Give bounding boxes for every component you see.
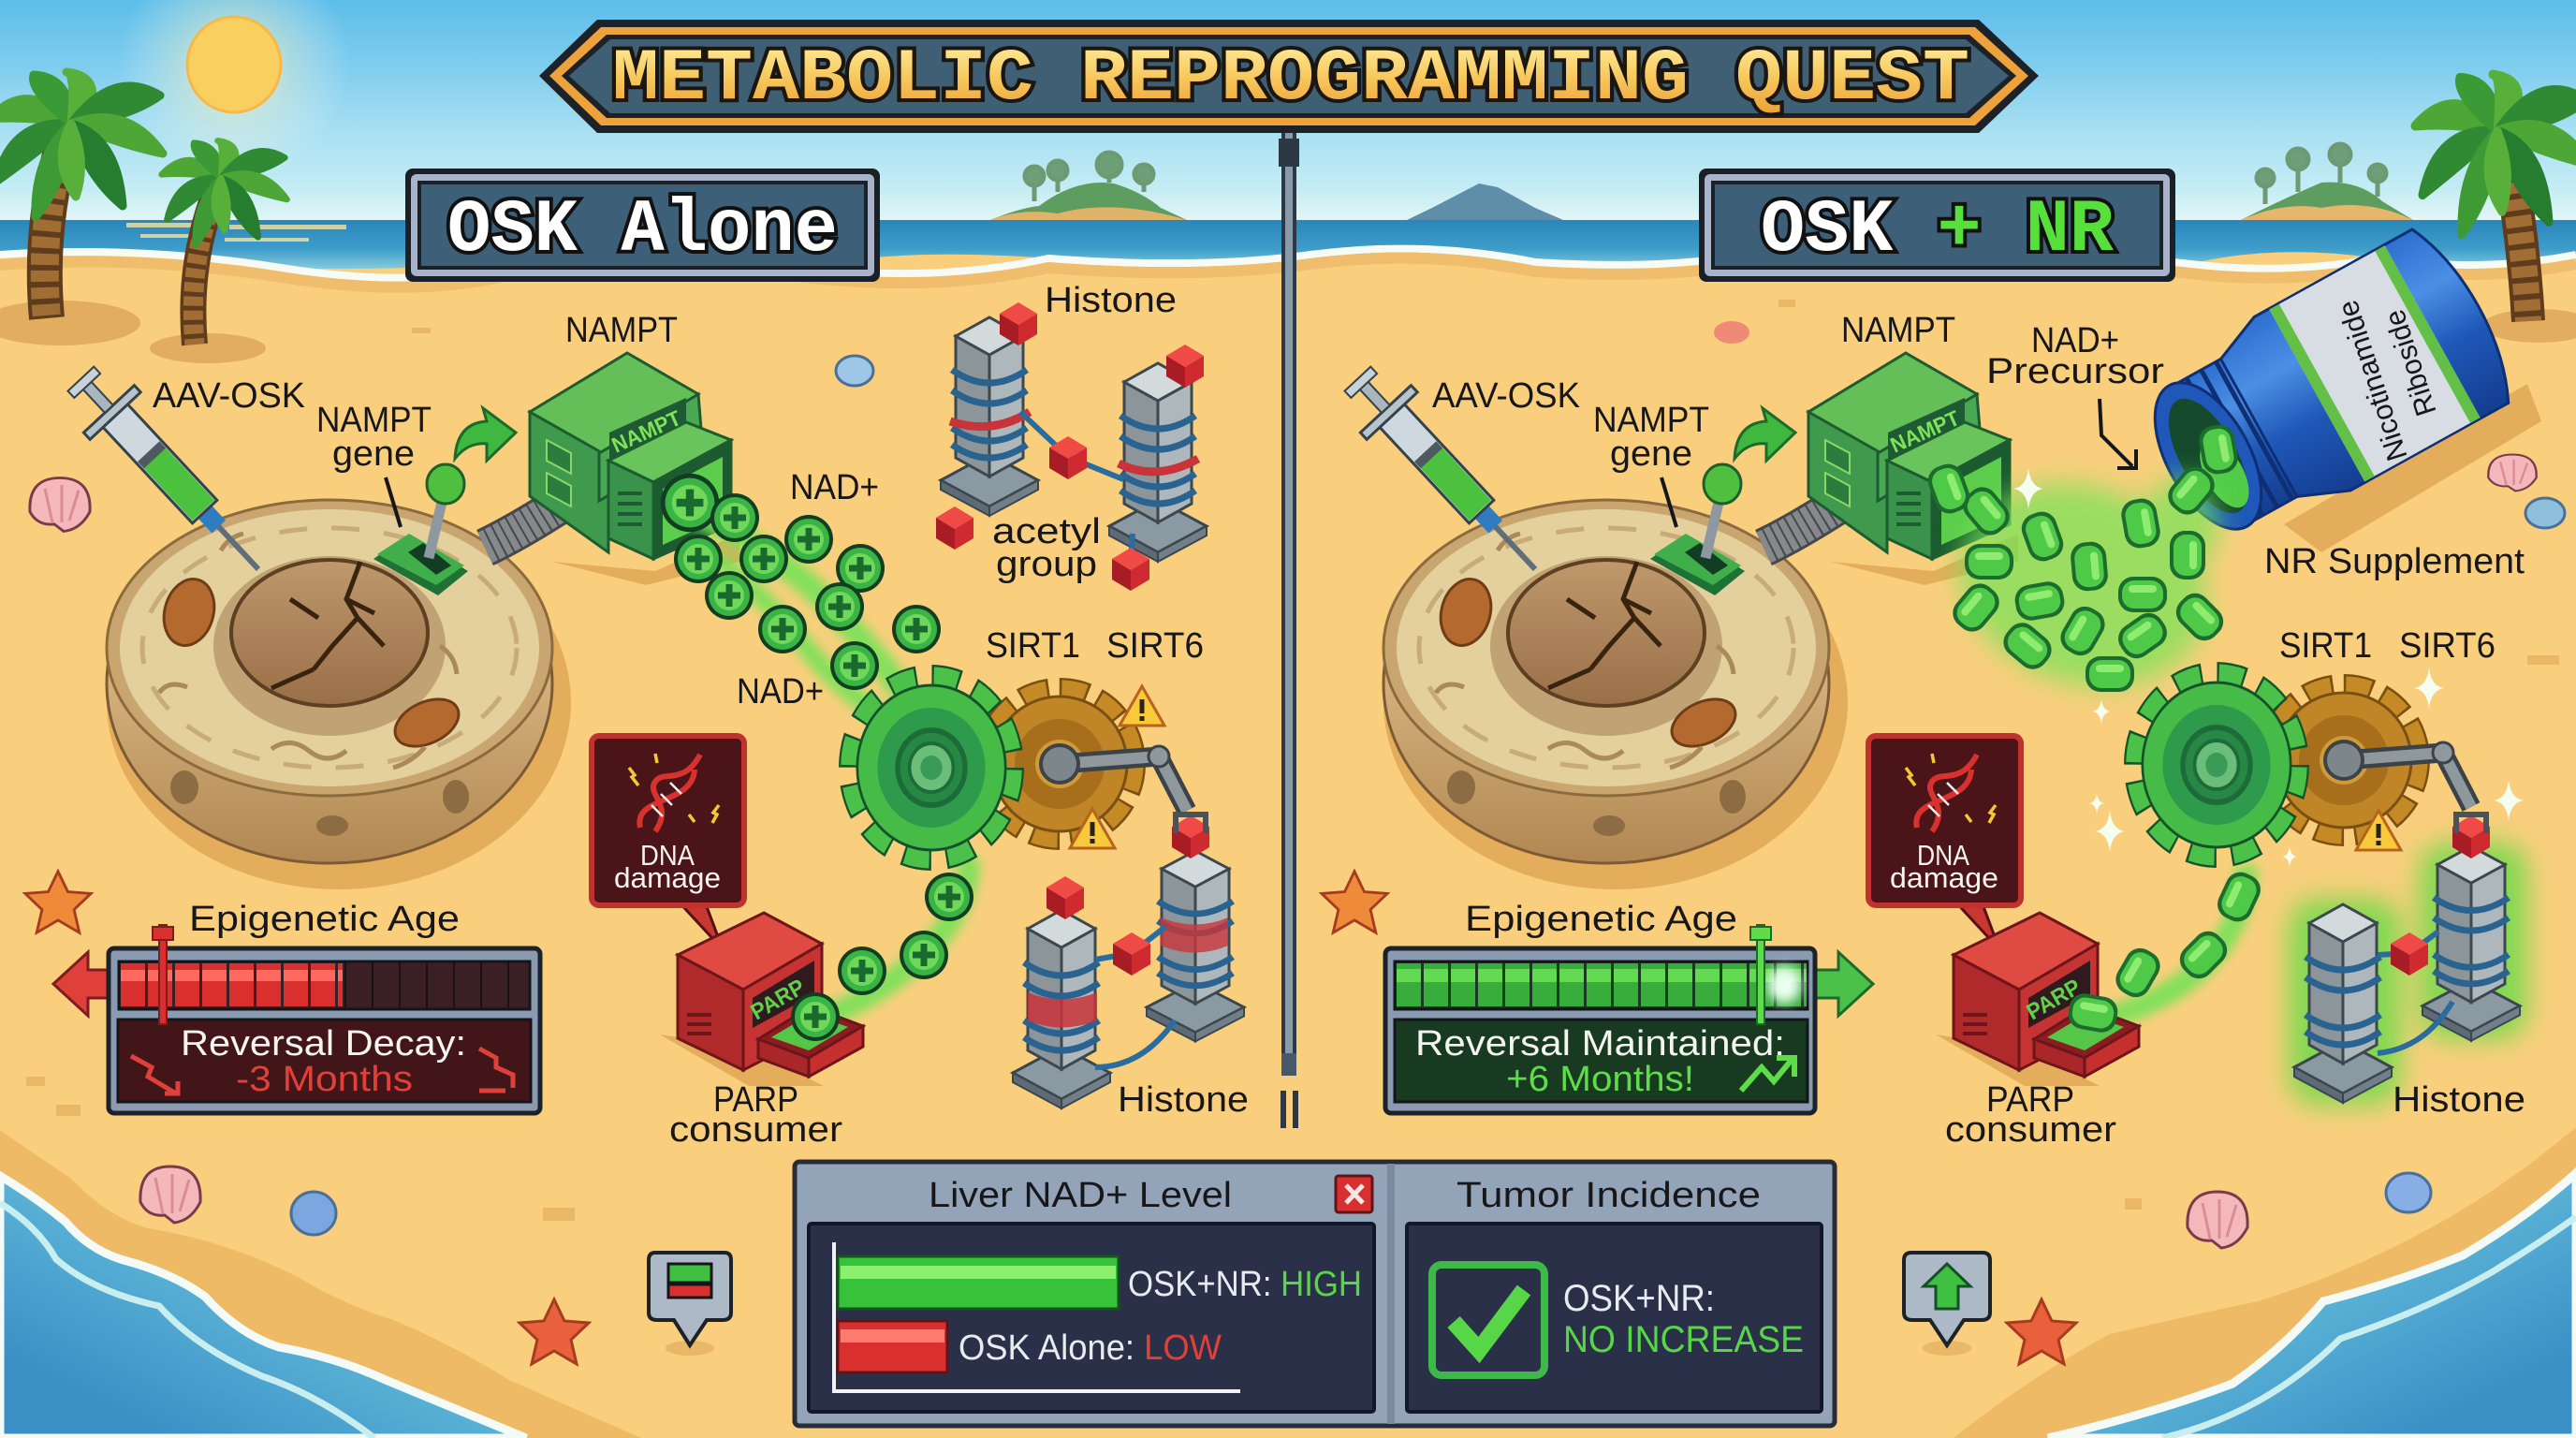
DNA damage callout	[1868, 736, 2021, 949]
arrow: gene activation	[1734, 408, 1795, 461]
title banner	[539, 20, 2039, 133]
labels	[153, 281, 1249, 1150]
labels: PARP	[713, 1080, 798, 1120]
labels: NAMPT	[1841, 311, 1955, 350]
labels: Precursor	[1986, 352, 2164, 391]
beach decorations: starfish, shells and pebbles	[25, 300, 2565, 1364]
gear: SIRT6	[2271, 687, 2417, 833]
age marker	[153, 925, 173, 1024]
heading: OSK + NR: OSK + NR	[1761, 188, 2114, 273]
arrow: gene activation	[455, 408, 516, 461]
arm claw and cube	[2452, 814, 2490, 858]
DNA damage label	[1890, 839, 1998, 894]
labels: SIRT6	[2399, 626, 2496, 666]
heading: OSK Alone	[405, 169, 880, 282]
icon: bar chart pin	[649, 1253, 731, 1356]
labels: acetyl	[992, 512, 1101, 551]
warning icon lower	[1070, 809, 1115, 848]
water corner left	[0, 1130, 641, 1438]
left distant island	[990, 153, 1187, 220]
progress bar	[119, 961, 530, 1009]
labels: NR Supplement	[2264, 542, 2525, 581]
histone pair, top	[936, 302, 1207, 591]
NAD+ glow stream	[697, 515, 969, 1020]
labels: AAV-OSK	[1432, 376, 1580, 416]
DNA damage label: DNA	[640, 839, 695, 872]
robot arm	[1041, 745, 1187, 811]
heading: OSK + NR	[1699, 169, 2175, 282]
labels: AAV-OSK	[153, 376, 305, 416]
panel: results dashboard	[795, 1162, 1835, 1426]
labels: consumer	[669, 1110, 842, 1150]
labels: Histone	[1045, 281, 1177, 320]
arrow: age backward	[53, 952, 110, 1016]
label OSK+NR HIGH: OSK+NR: HIGH	[1128, 1265, 1362, 1304]
capsule entering PARP	[2066, 991, 2120, 1034]
labels: NAMPT	[1593, 401, 1709, 440]
bar: OSK+NR	[838, 1256, 1119, 1309]
result box: Reversal Decay:	[181, 1024, 466, 1064]
labels	[1432, 311, 2525, 1150]
text OSK+NR: OSK+NR:	[1563, 1278, 1715, 1319]
DNA damage label	[614, 839, 721, 894]
DNA damage label: DNA	[1917, 839, 1969, 872]
palm tree large left	[0, 72, 163, 345]
icon: gene lever	[373, 464, 468, 595]
gear: SIRT6	[987, 691, 1133, 837]
labels: NAD+	[2031, 321, 2119, 360]
result: tumor incidence	[1407, 1224, 1822, 1412]
heading: Epigenetic Age: Epigenetic Age	[1465, 900, 1737, 939]
labels: group	[996, 545, 1097, 584]
frame	[109, 948, 540, 1113]
cell	[107, 500, 571, 889]
progress bar	[1395, 961, 1808, 1009]
labels: NAMPT	[316, 401, 432, 440]
warning icon upper	[1120, 686, 1164, 726]
robot arm	[2325, 741, 2471, 807]
arm claw and cube	[1172, 814, 1209, 858]
water corner right	[1954, 1127, 2576, 1438]
sun	[117, 0, 351, 182]
palm tree right	[2415, 75, 2576, 343]
heading: Liver NAD+ Level: Liver NAD+ Level	[929, 1176, 1232, 1215]
bottle label: Nicotinamide	[2331, 297, 2414, 465]
arrow: age forward	[1816, 952, 1873, 1016]
machine screen text: NAMPT	[1886, 405, 1963, 458]
result box	[1395, 1020, 1808, 1102]
labels: Histone	[2393, 1080, 2525, 1120]
panel: OSK alone pathway	[55, 281, 1249, 1150]
chart: liver NAD+	[809, 1224, 1374, 1412]
icon: NAMPT machine	[1764, 353, 2018, 585]
NAD+ molecules	[661, 474, 973, 995]
warning icon	[2356, 811, 2401, 850]
NAD+ entering PARP	[791, 992, 840, 1041]
panel: OSK + NR pathway	[1332, 219, 2541, 1150]
labels: SIRT1	[2279, 626, 2372, 666]
heading: Epigenetic Age: Epigenetic Age	[189, 900, 460, 939]
DNA damage label: damage	[1890, 861, 1998, 894]
icon: red close button	[1336, 1176, 1372, 1212]
PARP screen text: PARP	[2022, 975, 2086, 1025]
labels: gene	[332, 434, 415, 474]
labels: PARP	[1986, 1080, 2074, 1120]
age marker	[1750, 925, 1771, 1024]
distant mountain	[1407, 183, 1563, 220]
labels: SIRT1	[986, 626, 1080, 666]
title text: METABOLIC REPROGRAMMING QUEST	[612, 38, 1969, 121]
PARP screen text: PARP	[747, 975, 810, 1025]
icon: syringe	[1332, 355, 1560, 593]
frame	[1385, 948, 1815, 1113]
panel: epigenetic age, OSK + NR	[1385, 900, 1873, 1113]
heading: OSK Alone: OSK Alone	[447, 188, 838, 273]
machine screen text: NAMPT	[607, 405, 684, 458]
result box: -3 Months	[236, 1060, 413, 1099]
panel: epigenetic age, OSK alone	[53, 900, 540, 1113]
labels: consumer	[1945, 1110, 2116, 1150]
gear: SIRT1	[2136, 675, 2297, 855]
result box: +6 Months!	[1506, 1060, 1694, 1099]
cell	[1383, 500, 1848, 889]
text NO INCREASE: NO INCREASE	[1563, 1319, 1804, 1360]
labels: NAD+	[790, 468, 879, 507]
NR glow stream	[1930, 449, 2235, 721]
icon: PARP machine	[1936, 913, 2139, 1086]
NR stream lower	[2097, 866, 2247, 1020]
icon: NAMPT machine	[485, 353, 739, 585]
sparkles	[2013, 468, 2524, 867]
bar: OSK alone	[838, 1321, 947, 1372]
DNA damage callout	[592, 736, 744, 949]
heading: Tumor Incidence: Tumor Incidence	[1456, 1176, 1761, 1215]
labels: gene	[1610, 434, 1692, 474]
gear: SIRT1	[851, 678, 1012, 858]
bottle label: Riboside	[2378, 306, 2443, 420]
histone pair, bottom	[1013, 851, 1244, 1108]
healthy histone pair	[2289, 843, 2527, 1105]
icon: gene lever	[1650, 464, 1745, 595]
result box	[118, 1020, 531, 1102]
labels: Histone	[1118, 1080, 1249, 1120]
NR capsules	[1924, 422, 2265, 1003]
centre divider	[1279, 131, 1299, 1128]
labels: SIRT6	[1106, 626, 1204, 666]
icon: PARP machine	[660, 913, 863, 1086]
palm tree small left	[150, 140, 287, 363]
labels: NAD+	[737, 672, 824, 712]
icon: syringe	[55, 355, 284, 593]
right distant island	[2241, 144, 2413, 220]
icon: check box	[1432, 1265, 1544, 1375]
label OSK Alone LOW: OSK Alone: LOW	[959, 1328, 1222, 1368]
icon: up-arrow pin	[1904, 1253, 1990, 1356]
result box: Reversal Maintained:	[1415, 1024, 1785, 1064]
labels: NAMPT	[565, 311, 678, 350]
icon: NR supplement bottle	[2124, 219, 2541, 563]
DNA damage label: damage	[614, 861, 721, 894]
